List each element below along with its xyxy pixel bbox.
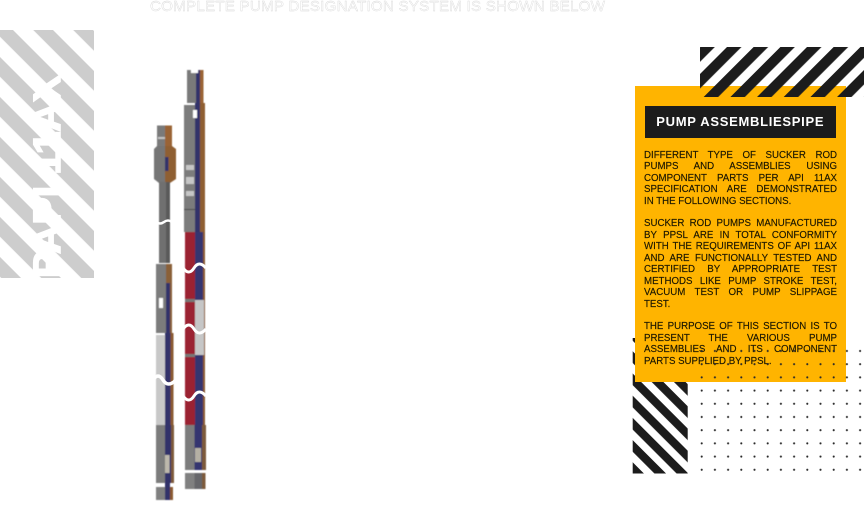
panel title: PUMP ASSEMBLIESPIPE xyxy=(656,114,824,129)
panel: pump assemblies xyxy=(635,86,846,382)
break line: right pump middle xyxy=(183,325,206,333)
text block: intro: COMPONENT PARTS PER API 11AX xyxy=(644,172,837,184)
text block: intro: PUMPS AND ASSEMBLIES USING xyxy=(644,161,837,172)
text block: purpose: ASSEMBLIES AND ITS COMPONENT xyxy=(644,344,837,355)
text block: intro: IN THE FOLLOWING SECTIONS. xyxy=(644,196,791,206)
break line: right pump lower xyxy=(183,392,206,400)
panel title xyxy=(644,106,836,138)
text block: conformity: WITH THE REQUIREMENTS OF API 11AX xyxy=(644,241,837,252)
text block: intro: DIFFERENT TYPE OF SUCKER ROD xyxy=(644,150,837,160)
break line: right pump upper xyxy=(183,264,206,272)
pump: right assembly xyxy=(184,70,206,489)
striped block: bottom right xyxy=(633,338,688,474)
striped panel: left xyxy=(0,30,94,278)
text block: conformity: VACUUM TEST OR PUMP SLIPPAGE xyxy=(644,287,837,298)
text block: conformity: BY PPSL ARE IN TOTAL CONFORMITY xyxy=(644,230,837,240)
text block: intro: SPECIFICATION ARE DEMONSTRATED xyxy=(644,184,837,195)
break line: left pump upper xyxy=(156,220,172,224)
text block: purpose: PARTS SUPPLIED BY PPSL. xyxy=(644,356,772,366)
break line: left pump lower xyxy=(153,376,176,384)
text block: conformity: METHODS LIKE PUMP STROKE TEST, xyxy=(644,276,837,286)
text block: conformity: CERTIFIED BY APPROPRIATE TEST xyxy=(644,264,837,275)
text block: purpose: THE PURPOSE OF THIS SECTION IS TO xyxy=(644,321,837,332)
text block: purpose: PRESENT THE VARIOUS PUMP xyxy=(644,332,837,344)
text block: intro xyxy=(644,150,837,206)
vertical title: PAPI 11AX xyxy=(27,74,69,278)
text block: purpose xyxy=(644,321,837,366)
text block: conformity: TEST. xyxy=(644,298,670,310)
dot grid xyxy=(695,344,864,476)
text block: conformity: SUCKER ROD PUMPS MANUFACTURED xyxy=(644,218,837,229)
pump: left assembly xyxy=(154,126,176,500)
text block: conformity: AND ARE FUNCTIONALLY TESTED AND xyxy=(644,252,837,264)
text block: conformity xyxy=(644,218,837,310)
striped block: top right xyxy=(700,47,864,97)
